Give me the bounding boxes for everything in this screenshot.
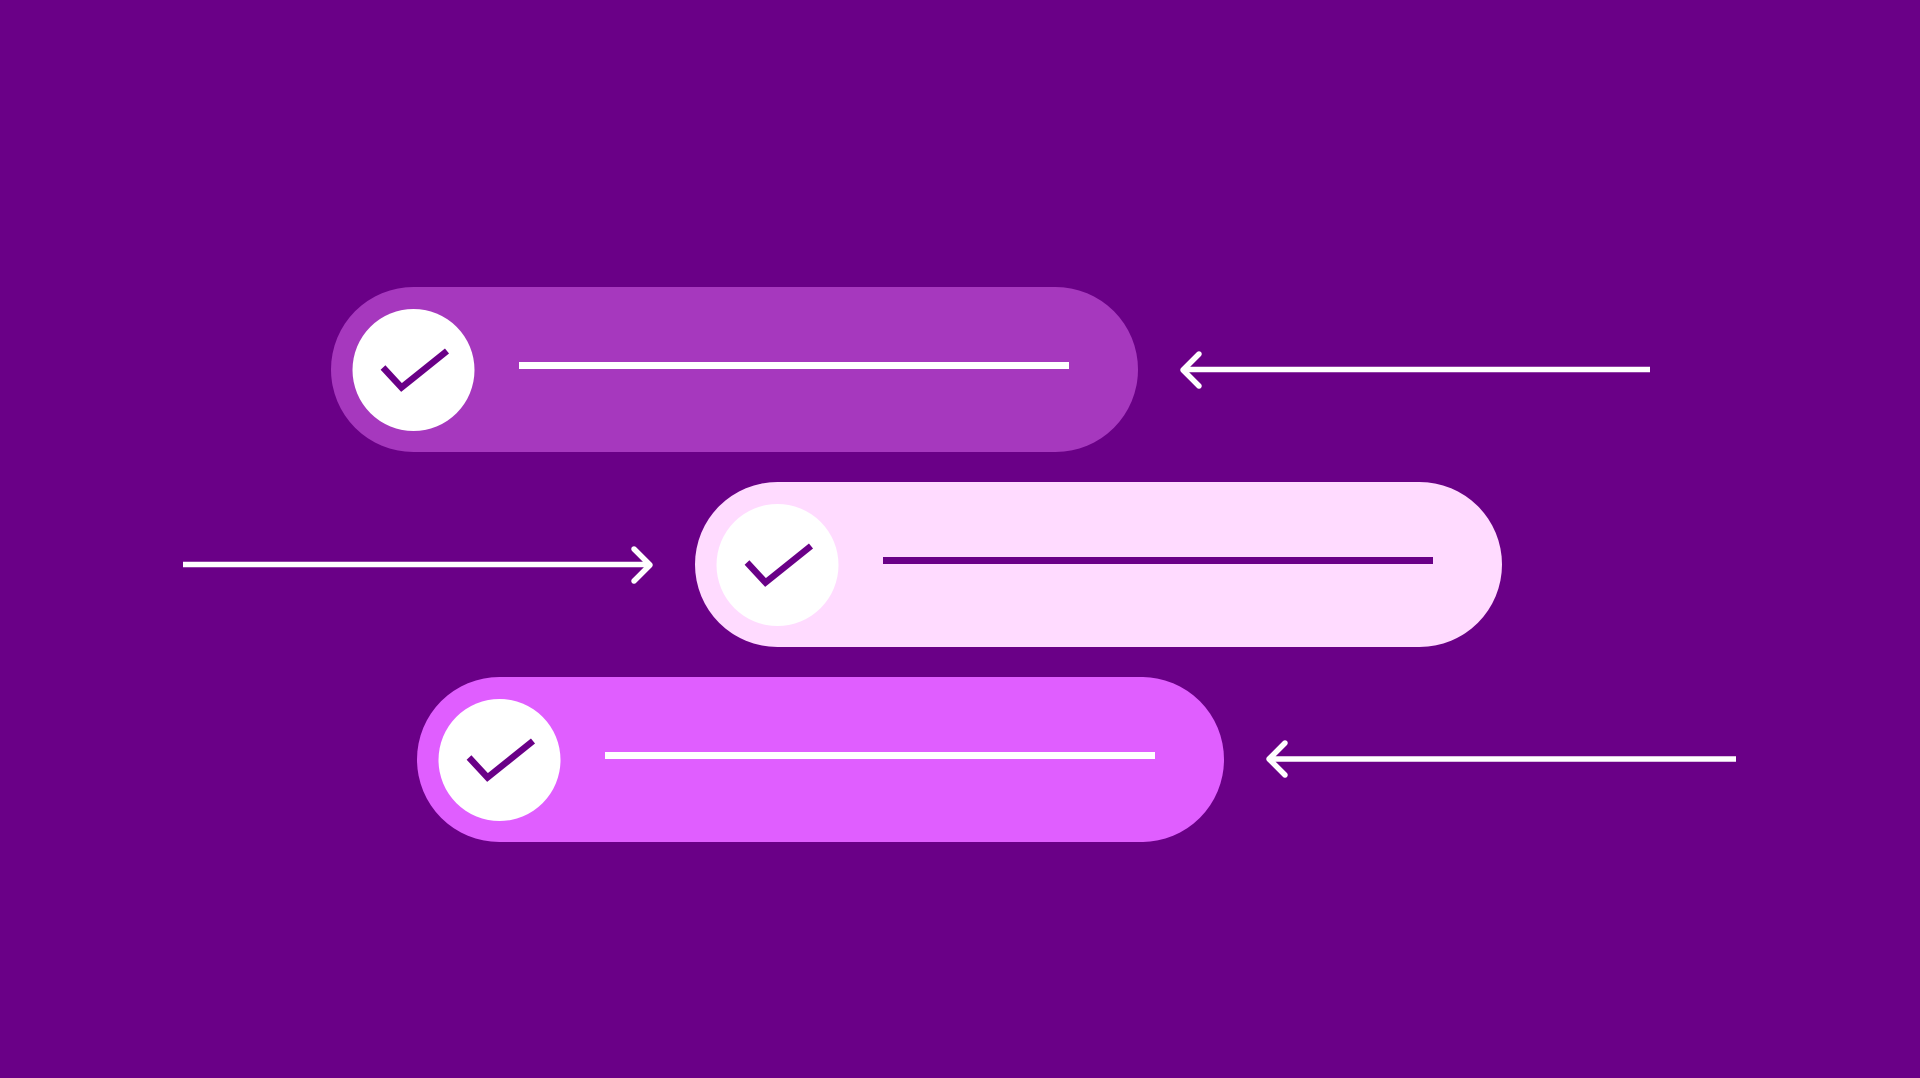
bottom item text line <box>605 752 1155 759</box>
middle item text line <box>883 557 1433 564</box>
icon: bottom check badge <box>438 699 560 821</box>
panel: bottom item pill <box>417 677 1224 842</box>
arrow: pointing right to middle item <box>183 549 650 581</box>
panel: middle item pill <box>695 482 1502 647</box>
arrow: pointing left to top item <box>1183 354 1650 386</box>
panel: top item pill <box>331 287 1138 452</box>
icon: middle check badge <box>716 504 838 626</box>
arrow: pointing left to bottom item <box>1269 743 1736 775</box>
top item text line <box>519 362 1069 369</box>
icon: top check badge <box>352 309 474 431</box>
